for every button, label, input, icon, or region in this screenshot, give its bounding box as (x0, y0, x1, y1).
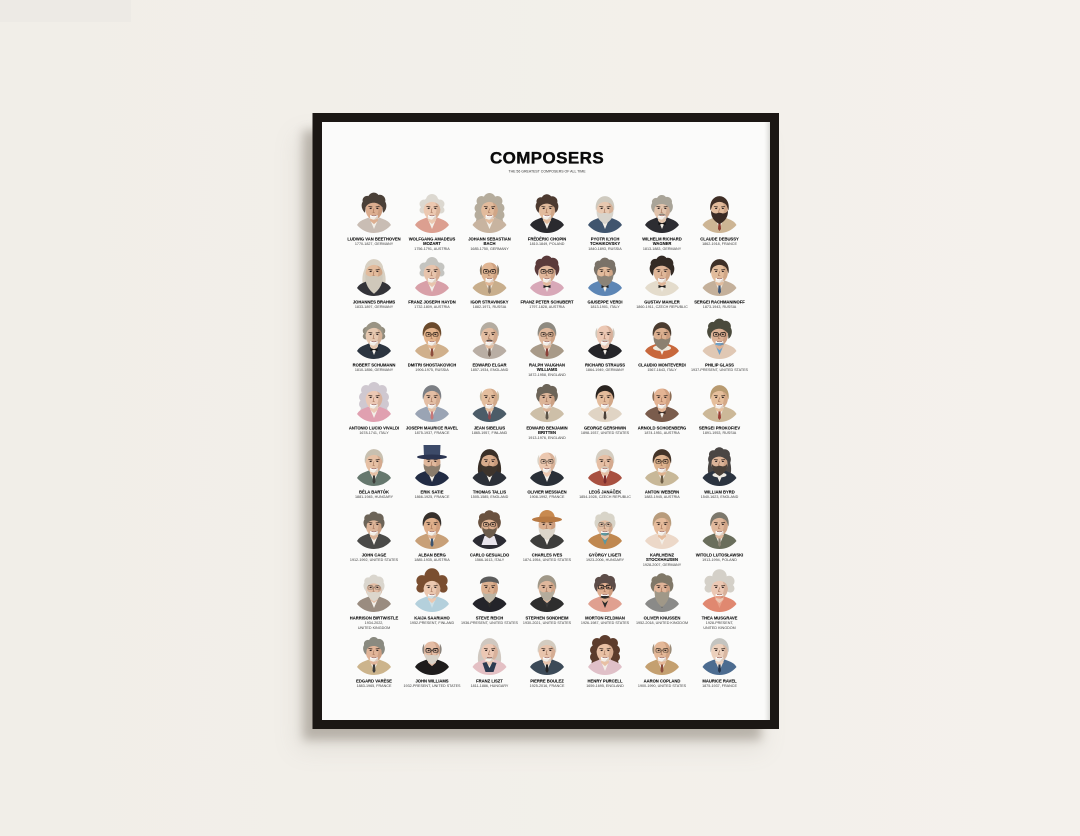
dates: 1932-PRESENT, UNITED STATES (403, 684, 461, 688)
name: EDGARD VARÈSE (356, 678, 392, 684)
name: CLAUDIO MONTEVERDI (638, 362, 686, 368)
composer: Schoenberg (638, 388, 686, 435)
composer: Tchaikovsky (588, 196, 622, 251)
dates: 1840-1893, RUSSIA (588, 247, 622, 251)
portrait (702, 385, 736, 422)
name: WILLIAMS (537, 367, 557, 372)
portrait (645, 388, 679, 422)
portrait (588, 385, 622, 422)
composer: Schumann (353, 322, 395, 372)
portrait (472, 449, 506, 486)
name: JOSEPH MAURICE RAVEL (406, 426, 459, 430)
dates: 1685-1750, GERMANY (470, 247, 509, 251)
composer: Gershwin (581, 385, 630, 435)
name: ANTON WEBERN (645, 490, 679, 494)
composer: Shostakovich (408, 322, 456, 372)
dates: 1883-1945, AUSTRIA (644, 495, 680, 499)
portrait (702, 196, 736, 233)
name: BACH (484, 241, 495, 246)
name: LEOŠ JANÁČEK (589, 490, 621, 494)
name: HARRISON BIRTWISTLE (350, 616, 398, 620)
composer: Maurice Ravel (702, 638, 737, 688)
dates: 1906-1975, RUSSIA (415, 368, 449, 372)
dates: 1567-1643, ITALY (647, 368, 677, 372)
composer: Stockhausen (643, 512, 682, 567)
name: DMITRI SHOSTAKOVICH (408, 362, 456, 368)
portrait (645, 195, 679, 233)
name: JEAN SIBELIUS (474, 426, 505, 430)
dates: 1925-2016, FRANCE (530, 684, 565, 688)
name: BRITTEN (538, 430, 556, 435)
portrait (530, 384, 564, 422)
dates: UNITED KINGDOM (703, 626, 736, 630)
dates: 1505-1585, ENGLAND (471, 495, 509, 499)
name: ARNOLD SCHOENBERG (638, 426, 686, 430)
portrait (702, 447, 736, 486)
name: RALPH VAUGHAN (529, 362, 565, 368)
composer: Haydn (408, 257, 456, 309)
name: KARLHEINZ (650, 552, 674, 558)
title: COMPOSERS (490, 148, 604, 168)
name: EDWARD BENJAMIN (526, 426, 568, 430)
portrait (530, 256, 564, 296)
portrait (645, 641, 679, 675)
subtitle: THE 56 GREATEST COMPOSERS OF ALL TIME (508, 170, 586, 174)
name: WOLFGANG AMADEUS (409, 236, 455, 242)
composer: Mahler (636, 256, 688, 309)
dates: 1952-PRESENT, FINLAND (410, 621, 454, 625)
composer: Ives (523, 510, 572, 562)
name: ANTONIO LUCIO VIVALDI (349, 426, 399, 430)
dates: 1937-PRESENT, UNITED STATES (691, 368, 749, 372)
name: FRANZ LISZT (476, 678, 503, 684)
portrait (415, 512, 449, 549)
portrait (415, 385, 449, 422)
dates: 1813-1901, ITALY (590, 305, 620, 309)
composer: Byrd (701, 447, 739, 499)
dates: 1913-1976, ENGLAND (528, 436, 566, 440)
portrait (357, 512, 391, 549)
composer: Joseph Maurice Ravel (406, 385, 459, 435)
composer: Satie (415, 445, 450, 499)
composer: Cage (350, 512, 399, 562)
composer: Debussy (700, 196, 739, 246)
portrait (415, 194, 449, 233)
dates: 1659-1695, ENGLAND (586, 684, 624, 688)
dates: 1891-1953, RUSSIA (703, 431, 737, 435)
composer: Musgrave (702, 569, 738, 630)
portrait (472, 510, 506, 549)
composer: Chopin (528, 194, 566, 246)
portrait (645, 573, 679, 612)
name: KAIJA SAARIAHO (414, 616, 451, 620)
composer: Reich (461, 576, 519, 625)
composer: Wagner (642, 195, 682, 251)
portrait (588, 325, 622, 359)
dates: 1874-1951, AUSTRIA (644, 431, 680, 435)
name: BÉLA BARTÓK (359, 490, 389, 494)
name: GEORGE GERSHWIN (584, 426, 626, 430)
name: GUSTAV MAHLER (644, 300, 680, 304)
composer: Copland (638, 641, 687, 688)
name: FRANZ JOSEPH HAYDN (408, 300, 456, 304)
composer: Vivaldi (349, 382, 399, 435)
frame shadow (296, 130, 764, 750)
composer: Prokofiev (699, 385, 740, 435)
name: WILHELM RICHARD (642, 236, 682, 242)
portrait (702, 569, 736, 612)
composer: Bartók (355, 449, 394, 499)
composer: Gesualdo (470, 510, 510, 562)
portrait (415, 322, 449, 359)
portrait (530, 194, 564, 233)
dates: 1566-1613, ITALY (475, 558, 505, 562)
composer: Mozart (409, 194, 456, 251)
portrait (472, 322, 506, 359)
dates: 1928-PRESENT, (706, 621, 733, 625)
composer: Messiaen (527, 452, 567, 499)
dates: 1952-2018, UNITED KINGDOM (636, 621, 688, 625)
composer: Webern (644, 449, 680, 499)
name: JOHN CAGE (362, 552, 387, 558)
dates: 1912-1992, UNITED STATES (350, 558, 399, 562)
name: MOZART (423, 241, 441, 246)
portrait (357, 449, 391, 486)
composer: Liszt (471, 638, 509, 688)
portrait (415, 568, 449, 612)
composer: Vaughan Williams (528, 322, 566, 377)
portrait (702, 319, 736, 359)
name: HENRY PURCELL (588, 678, 623, 684)
dates: 1926-1987, UNITED STATES (581, 621, 630, 625)
composer: Varèse (356, 637, 392, 688)
portrait (645, 322, 679, 359)
name: SERGEI RACHMANINOFF (694, 300, 745, 304)
portrait (415, 445, 449, 486)
name: WITOLD LUTOSŁAWSKI (696, 552, 743, 558)
dates: 1885-1935, AUSTRIA (414, 558, 450, 562)
portrait (702, 512, 736, 549)
portrait (472, 576, 506, 612)
name: OLIVIER MESSIAEN (527, 490, 567, 494)
composer: Birtwistle (350, 575, 398, 630)
poster paper (322, 122, 770, 720)
composer: Beethoven (347, 193, 401, 246)
dates: 1797-1828, AUSTRIA (529, 305, 565, 309)
composer: Rachmaninoff (694, 259, 745, 309)
portrait (702, 259, 736, 296)
name: JOHANNES BRAHMS (353, 300, 395, 304)
composer: Elgar (471, 322, 509, 372)
name: THOMAS TALLIS (473, 490, 506, 494)
composer: Saariaho (410, 568, 454, 625)
portrait (472, 388, 506, 422)
dates: 1874-1954, UNITED STATES (523, 558, 572, 562)
name: SERGEI PROKOFIEV (699, 426, 740, 430)
portrait (645, 449, 679, 486)
portrait (530, 452, 564, 486)
portrait (357, 382, 391, 422)
name: CARLO GESUALDO (470, 552, 510, 558)
composer: Sibelius (472, 388, 508, 435)
dates: 1813-1883, GERMANY (643, 247, 682, 251)
name: TCHAIKOVSKY (590, 241, 620, 246)
portrait (588, 449, 622, 486)
portrait (472, 638, 506, 675)
name: CLAUDE DEBUSSY (700, 236, 739, 242)
portrait (357, 575, 391, 612)
dates: 1810-1856, GERMANY (355, 368, 394, 372)
portrait (472, 262, 506, 296)
composer: Tallis (471, 449, 509, 499)
dates: 1857-1934, ENGLAND (471, 368, 509, 372)
dates: 1854-1928, CZECH REPUBLIC (579, 495, 631, 499)
portrait (588, 635, 622, 675)
composer: Feldman (581, 574, 630, 625)
name: FRÉDÉRIC CHOPIN (528, 236, 566, 242)
composer: Berg (414, 512, 450, 562)
dates: 1898-1937, UNITED STATES (581, 431, 630, 435)
name: GYÖRGY LIGETI (589, 552, 621, 558)
composer: John Williams (403, 641, 461, 688)
name: EDWARD ELGAR (472, 362, 507, 368)
dates: 1810-1849, POLAND (530, 242, 565, 246)
dates: 1756-1791, AUSTRIA (414, 247, 450, 251)
name: STEVE REICH (476, 616, 503, 620)
composer: Lutosławski (696, 512, 743, 562)
composer: Brahms (353, 259, 395, 309)
top-left wall band (0, 0, 131, 22)
dates: 1732-1809, AUSTRIA (414, 305, 450, 309)
paper right edge shading (764, 122, 770, 720)
dates: 1678-1741, ITALY (359, 431, 389, 435)
composer: Monteverdi (638, 322, 686, 372)
portrait (530, 640, 564, 675)
portrait (415, 257, 449, 296)
name: IGOR STRAVINSKY (470, 300, 509, 304)
name: FRANZ PETER SCHUBERT (520, 300, 574, 304)
name: GIUSEPPE VERDI (588, 300, 622, 304)
name: PHILIP GLASS (705, 362, 734, 368)
dates: 1864-1949, GERMANY (586, 368, 625, 372)
dates: 1923-2006, HUNGARY (586, 558, 625, 562)
dates: 1860-1911, CZECH REPUBLIC (636, 305, 688, 309)
composer: Purcell (586, 635, 624, 688)
poster frame (312, 113, 779, 729)
name: OLIVER KNUSSEN (644, 616, 680, 620)
dates: 1930-2021, UNITED STATES (523, 621, 572, 625)
name: ALBAN BERG (418, 552, 446, 558)
portrait (530, 322, 564, 359)
name: WILLIAM BYRD (704, 490, 735, 494)
portrait (357, 259, 391, 296)
dates: 1872-1958, ENGLAND (528, 373, 566, 377)
composer: Richard Strauss (585, 325, 625, 372)
composer: Bach (468, 193, 511, 251)
dates: 1873-1943, RUSSIA (703, 305, 737, 309)
name: PYOTR ILYICH (591, 236, 619, 242)
portrait (588, 512, 622, 549)
composer: Ligeti (586, 512, 625, 562)
composer: Verdi (588, 258, 622, 309)
dates: 1934-2022, (365, 621, 383, 625)
portrait (415, 641, 449, 675)
composer: Boulez (530, 640, 565, 688)
dates: 1913-1994, POLAND (702, 558, 737, 562)
dates: 1883-1965, FRANCE (357, 684, 392, 688)
portrait (588, 258, 622, 296)
dates: 1928-2007, GERMANY (643, 563, 682, 567)
dates: 1866-1925, FRANCE (415, 495, 450, 499)
name: JOHANN SEBASTIAN (468, 236, 511, 242)
dates: 1875-1937, FRANCE (415, 431, 450, 435)
portrait (702, 638, 736, 675)
dates: 1811-1886, HUNGARY (471, 684, 509, 688)
portrait (530, 510, 564, 549)
dates: 1833-1897, GERMANY (355, 305, 394, 309)
dates: 1540-1623, ENGLAND (701, 495, 739, 499)
composer: Schubert (520, 256, 574, 309)
portrait (472, 193, 506, 233)
name: JOHN WILLIAMS (415, 678, 449, 684)
composer: Sondheim (523, 575, 572, 625)
name: MORTON FELDMAN (585, 616, 625, 620)
composer: Stravinsky (470, 262, 509, 309)
name: ROBERT SCHUMANN (353, 362, 395, 368)
name: STEPHEN SONDHEIM (525, 616, 569, 620)
composer: Janáček (579, 449, 631, 499)
dates: 1881-1945, HUNGARY (355, 495, 394, 499)
portrait (357, 322, 391, 359)
name: STOCKHAUSEN (646, 557, 678, 562)
portrait (645, 256, 679, 296)
dates: 1936-PRESENT, UNITED STATES (461, 621, 519, 625)
name: RICHARD STRAUSS (585, 362, 625, 368)
dates: 1875-1937, FRANCE (702, 684, 737, 688)
composer: Philip Glass (691, 319, 749, 372)
portrait (357, 193, 391, 233)
portrait (588, 574, 622, 612)
composer: Knussen (636, 573, 688, 625)
dates: 1882-1971, RUSSIA (473, 305, 507, 309)
dates: 1770-1827, GERMANY (355, 242, 394, 246)
dates: 1862-1918, FRANCE (702, 242, 737, 246)
name: PIERRE BOULEZ (530, 678, 564, 684)
name: ERIK SATIE (421, 490, 444, 494)
portrait (588, 196, 622, 233)
name: MAURICE RAVEL (702, 678, 737, 684)
dates: 1908-1992, FRANCE (530, 495, 565, 499)
dates: 1865-1957, FINLAND (472, 431, 508, 435)
name: THEA MUSGRAVE (702, 616, 738, 620)
name: WAGNER (653, 241, 671, 246)
name: CHARLES IVES (532, 552, 563, 558)
name: AARON COPLAND (644, 678, 680, 684)
name: LUDWIG VAN BEETHOVEN (347, 236, 401, 242)
portrait (530, 575, 564, 612)
dates: 1900-1990, UNITED STATES (638, 684, 687, 688)
dates: UNITED KINGDOM (358, 626, 390, 630)
portrait (357, 637, 391, 675)
portrait (645, 512, 679, 549)
composer: Britten (526, 384, 568, 440)
